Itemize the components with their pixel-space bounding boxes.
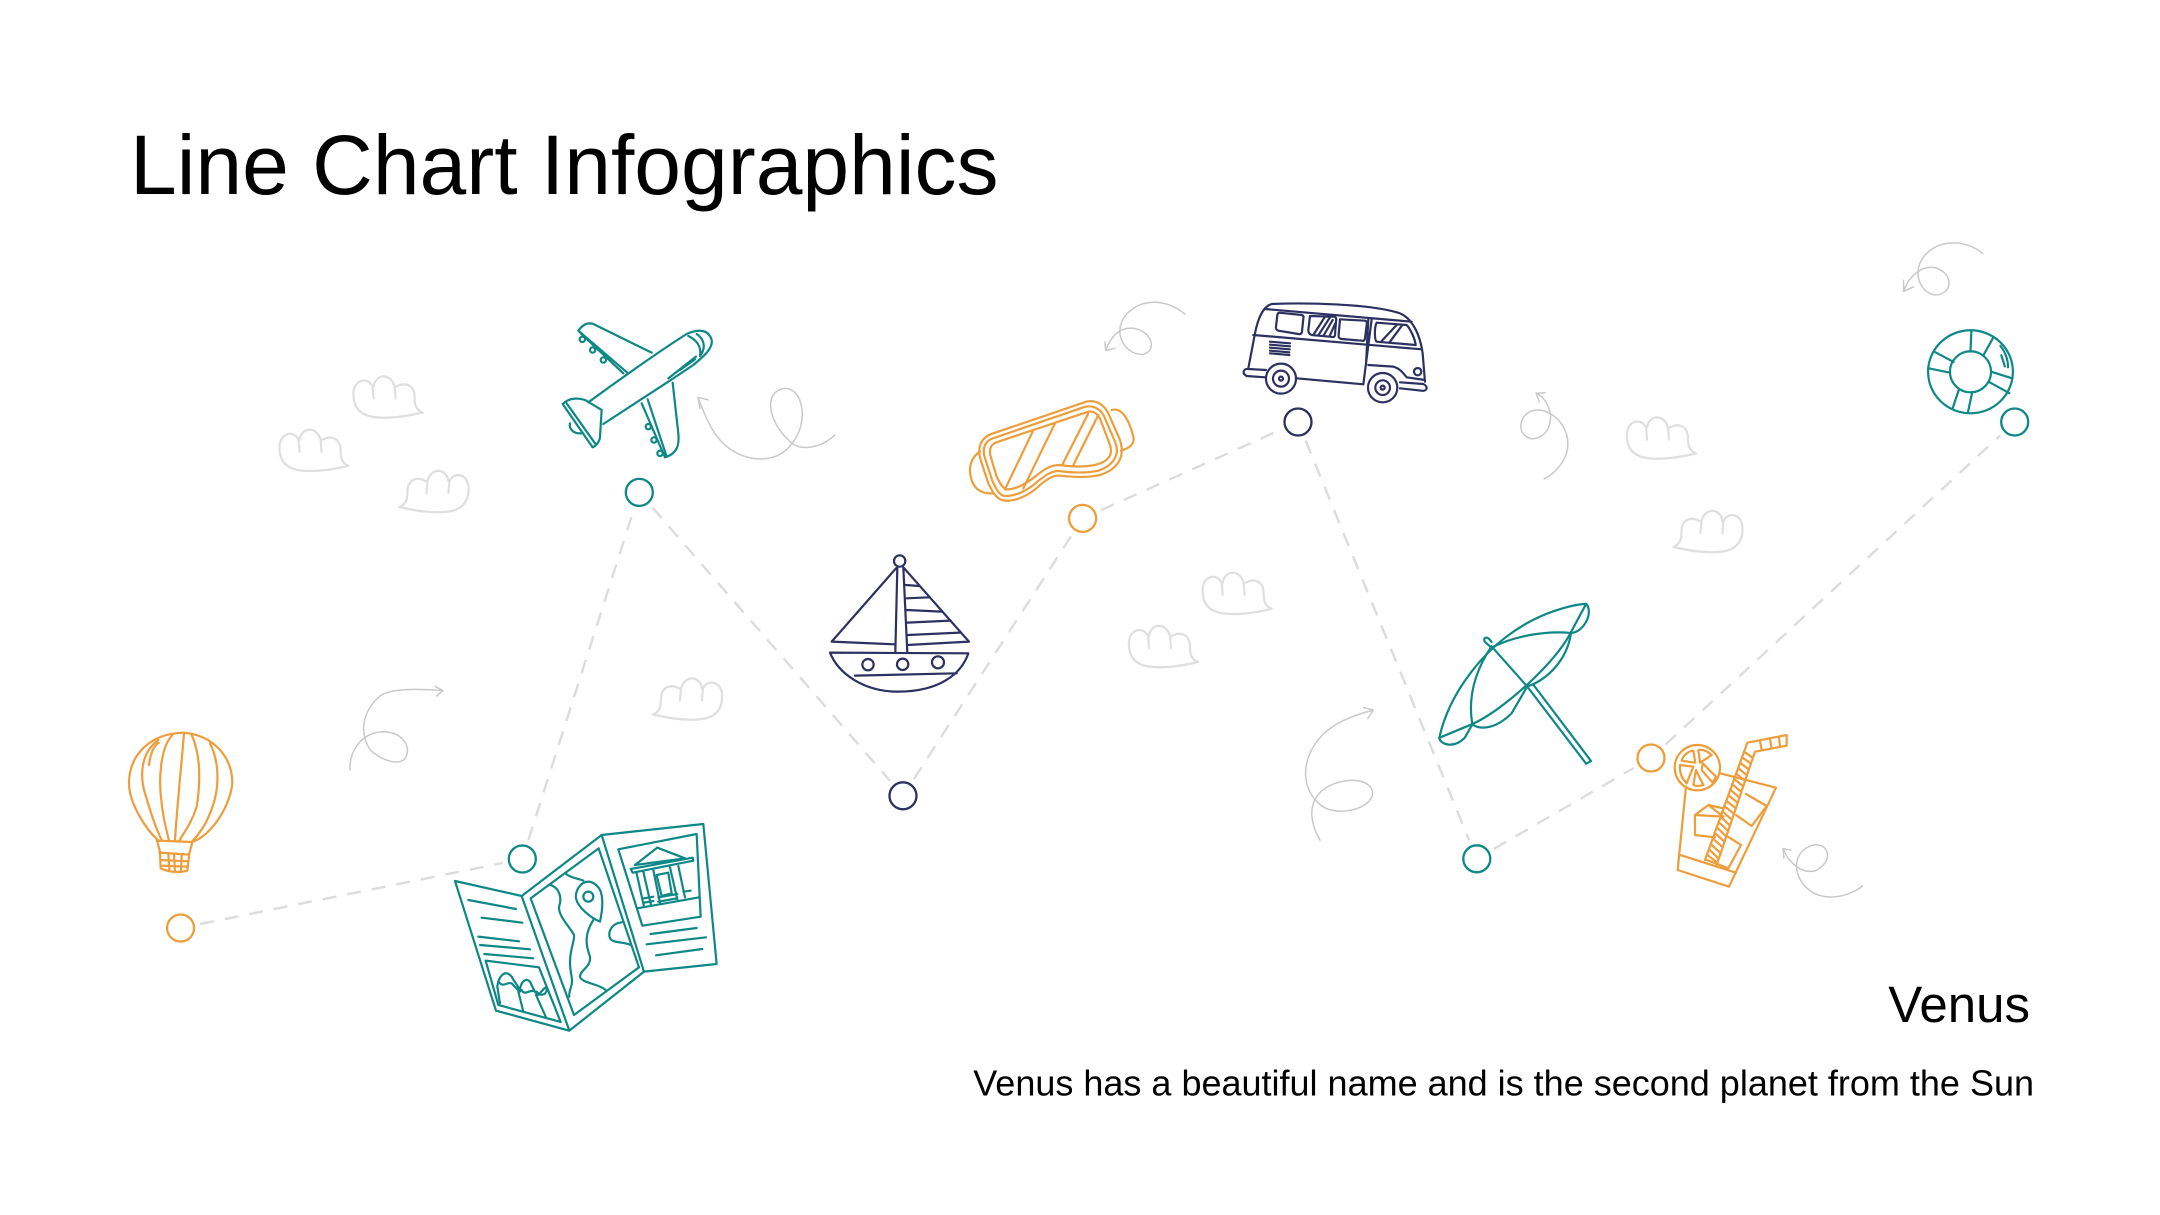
node 3 teal	[626, 479, 653, 506]
node 9 teal	[2001, 408, 2028, 436]
node 6 navy	[1284, 408, 1312, 436]
node 1 orange	[167, 914, 194, 942]
cloud 4	[653, 678, 722, 720]
node 8 orange	[1638, 744, 1664, 772]
icon: swimming goggles	[970, 401, 1134, 501]
cloud 3	[399, 471, 469, 512]
dashed line chart path	[200, 430, 2000, 924]
swirl arrow top right	[1904, 243, 1983, 295]
heading: Venus: Venus	[1888, 976, 2030, 1033]
cloud 6	[1129, 626, 1198, 667]
cloud 5	[1203, 573, 1272, 614]
cloud 2	[279, 430, 349, 471]
icon: cocktail glass	[1675, 735, 1787, 887]
icon: sailboat	[830, 555, 969, 692]
swirl arrow near cocktail	[1783, 845, 1862, 897]
swirl arrow centre bottom	[1306, 707, 1373, 840]
swirl arrow near van	[1521, 393, 1568, 479]
icon: hot air balloon	[129, 733, 232, 872]
cloud 1	[353, 376, 423, 418]
title: Line Chart Infographics	[130, 118, 999, 212]
swirl arrow near plane	[698, 388, 835, 459]
cloud 8	[1673, 511, 1743, 552]
description text: Venus has a beautiful name and is the second planet from the Sun	[973, 1062, 2034, 1104]
icon: airplane	[563, 323, 712, 457]
swirl arrow above goggles	[1105, 302, 1185, 354]
node 4 navy	[890, 782, 916, 809]
icon: life buoy	[1928, 330, 2013, 413]
node 5 orange	[1069, 505, 1096, 532]
icon: beach umbrella	[1439, 604, 1591, 764]
swirl arrow lower left	[350, 686, 443, 770]
node 7 teal	[1463, 845, 1490, 872]
icon: camper van	[1244, 303, 1427, 402]
icon: folded map	[455, 824, 717, 1031]
cloud 7	[1627, 417, 1696, 459]
node 2 teal	[509, 846, 536, 872]
